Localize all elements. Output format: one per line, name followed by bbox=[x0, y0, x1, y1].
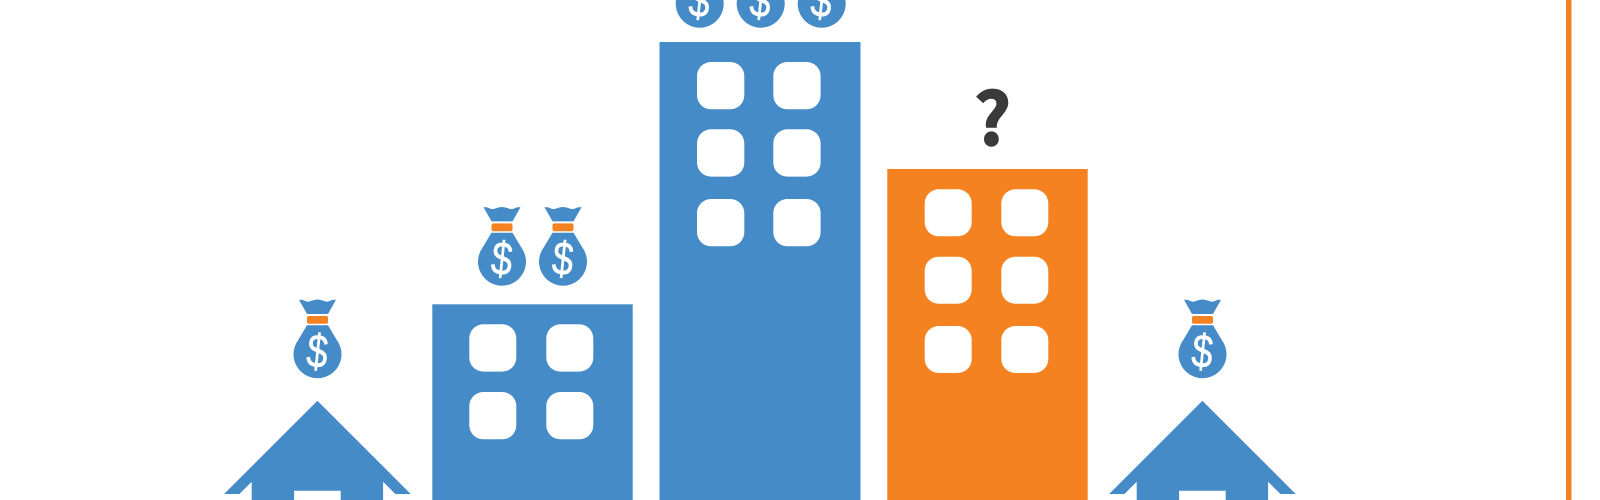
money bag 2 above tall building bbox=[737, 0, 785, 29]
money bag 3 above tall building bbox=[798, 0, 846, 29]
money bag 2 above small building: $ bbox=[550, 232, 576, 287]
question mark: ? bbox=[974, 61, 1011, 166]
money bag above right house bbox=[1178, 300, 1226, 379]
money bag above left house: $ bbox=[304, 324, 331, 379]
money bag 1 above small building: $ bbox=[489, 232, 515, 287]
money bag above right house: $ bbox=[1189, 324, 1216, 379]
orange building bbox=[887, 169, 1088, 500]
money bag 1 above tall building bbox=[676, 0, 724, 29]
money bag 1 above small building bbox=[478, 207, 526, 287]
money bag above left house bbox=[294, 300, 342, 379]
money bag 2 above small building bbox=[539, 207, 587, 287]
right house bbox=[1109, 401, 1296, 500]
left house bbox=[224, 401, 411, 500]
orange vertical line bbox=[1566, 0, 1572, 500]
small blue building bbox=[432, 304, 633, 500]
tall blue building bbox=[660, 42, 860, 500]
